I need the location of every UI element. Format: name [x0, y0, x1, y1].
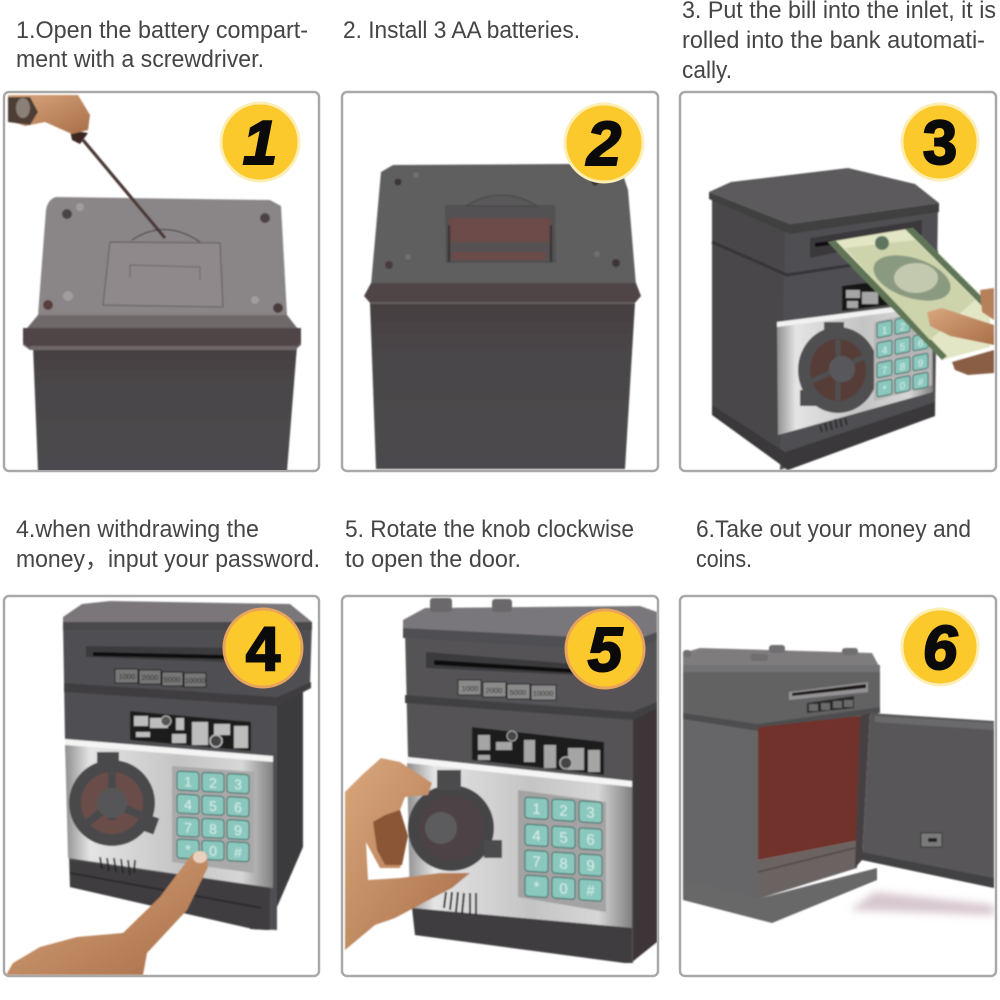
badge: 3: 3: [923, 109, 957, 178]
ornament strip: [130, 711, 251, 751]
keypad: 6: [586, 831, 595, 849]
illustration: inserting a bill: 3: [918, 318, 924, 330]
keypad: 0: [209, 843, 217, 859]
denomination labels: [807, 696, 854, 713]
base: [412, 908, 632, 963]
keypad: 2: [559, 802, 568, 820]
panel: step 2: [342, 92, 658, 471]
badge: 1: 1: [243, 109, 277, 178]
keypad: *: [185, 841, 191, 858]
caption: step 5: [345, 516, 634, 573]
illustration: inserting a bill: #: [918, 377, 924, 389]
keypad: *: [534, 879, 540, 896]
slot and note labels: [86, 646, 228, 662]
icon: pointing hand: [6, 853, 208, 975]
slot: [426, 652, 575, 675]
door latch: [921, 833, 942, 847]
badge: 5: 5: [588, 616, 624, 685]
keypad: 3: [586, 804, 595, 822]
keypad: 3: [234, 776, 242, 792]
keypad: 1: [532, 801, 541, 818]
badge: 2: [565, 104, 643, 182]
denomination labels: 1000: [119, 672, 135, 681]
keypad: #: [586, 882, 595, 900]
floor shadow: [850, 892, 994, 915]
panel: step 3: [680, 92, 996, 471]
speaker grille: [100, 857, 135, 875]
denomination labels: 10000: [533, 689, 553, 698]
keypad: 0: [559, 880, 568, 898]
caption: step 3: [682, 0, 996, 84]
keypad: 2: [209, 775, 217, 791]
badge: 3: [902, 104, 978, 180]
keypad: #: [234, 844, 242, 860]
illustration: open battery compartment: [364, 164, 641, 469]
keypad: 9: [586, 857, 595, 875]
keypad: 5: [559, 829, 568, 847]
caption: step 2: 2. Install 3 AA batteries.: [343, 17, 580, 44]
illustration: rotating the knob: [345, 598, 657, 963]
caption: step 4: money，input your password.: [16, 546, 320, 573]
denomination labels: 5000: [164, 675, 180, 684]
badge: 1: [221, 103, 299, 181]
keypad: 7: [532, 854, 541, 871]
red interior: [758, 716, 860, 860]
caption: step 3: cally.: [682, 57, 732, 84]
illustration: inserting a bill: 5: [900, 342, 906, 354]
silver door plate: [65, 740, 273, 888]
denomination labels: [458, 680, 556, 700]
denomination labels: 2000: [142, 673, 158, 682]
caption: step 4: [16, 516, 320, 573]
illustration: inserting a bill: 0: [900, 381, 906, 393]
illustration: inserting a bill: 4: [882, 345, 888, 357]
keypad: [172, 766, 254, 873]
keypad: 7: [184, 819, 192, 836]
silver door plate: [407, 757, 632, 928]
illustration: inserting a bill: 7: [882, 365, 888, 377]
icon: hand: [8, 95, 90, 134]
denomination labels: 1000: [462, 684, 478, 693]
icon: hand turning knob: [345, 758, 470, 950]
badge: 5: [566, 610, 644, 688]
speaker grille: [820, 418, 847, 432]
illustration: inserting a bill: 9: [918, 358, 924, 370]
caption: step 5: to open the door.: [345, 546, 521, 573]
bill slot: [789, 682, 868, 700]
keypad: 5: [209, 798, 217, 814]
illustration: entering password: [6, 601, 312, 975]
keypad: 1: [184, 773, 192, 790]
panel: step 5: [342, 596, 658, 976]
speaker grille: [444, 892, 476, 915]
caption: step 1: [16, 17, 308, 73]
front face: [405, 630, 657, 963]
keypad: [874, 309, 932, 401]
open door: [862, 713, 994, 888]
base: [70, 860, 270, 930]
front face: [63, 622, 312, 930]
panel: step 6: [680, 596, 996, 976]
panel: step 1: [4, 92, 319, 471]
caption: step 3: rolled into the bank automati-: [682, 27, 985, 54]
knob: [798, 322, 878, 413]
banknote: [828, 228, 990, 360]
knob: [69, 752, 159, 846]
badge: 6: [902, 609, 978, 685]
denomination labels: 10000: [185, 676, 205, 685]
keypad: 8: [209, 821, 217, 837]
denomination labels: 2000: [486, 686, 502, 695]
badge: 6: 6: [923, 614, 958, 683]
ornament strip: [472, 727, 604, 775]
side face: [631, 705, 657, 963]
keypad: 8: [559, 855, 568, 873]
caption: step 4: 4.when withdrawing the: [16, 516, 259, 543]
illustration: inserting a bill: 1: [882, 325, 888, 337]
caption: step 1: 1.Open the battery compart-: [16, 17, 308, 44]
keypad: 6: [234, 799, 242, 815]
badge: 2: 2: [586, 110, 621, 179]
illustration: inserting a bill: *: [883, 384, 887, 396]
illustration: inserting a bill: [709, 168, 994, 470]
icon: screwdriver: [83, 140, 165, 238]
icon: hand holding bill: [927, 288, 994, 375]
keypad: 4: [184, 796, 192, 813]
illustration: open door with coins bay: [683, 645, 994, 923]
side face: [250, 690, 303, 930]
slot: [810, 220, 922, 258]
denomination labels: 5000: [510, 688, 526, 697]
caption: step 1: ment with a screwdriver.: [16, 46, 264, 73]
badge: 4: [224, 609, 302, 687]
illustration: inserting a bill: 2: [900, 322, 906, 334]
keypad: [518, 790, 606, 912]
keypad: 4: [532, 828, 541, 845]
keypad: 9: [234, 822, 242, 838]
coin tray: [758, 840, 860, 899]
ornament strip: [842, 280, 888, 311]
illustration: inserting a bill: 8: [900, 362, 906, 374]
illustration: inserting a bill: 6: [918, 338, 924, 350]
knob: [408, 770, 502, 871]
panel: step 4: [4, 596, 319, 976]
caption: step 5: 5. Rotate the knob clockwise: [345, 516, 634, 543]
denomination labels: [115, 669, 206, 687]
badge: 4: 4: [246, 615, 281, 684]
bank body: [683, 710, 758, 902]
caption: step 6: [696, 516, 971, 573]
caption: step 6: 6.Take out your money and: [696, 516, 971, 543]
caption: step 6: coins.: [696, 546, 752, 573]
silver door plate: [777, 302, 933, 435]
illustration: bank top with screwdriver: [8, 95, 301, 471]
